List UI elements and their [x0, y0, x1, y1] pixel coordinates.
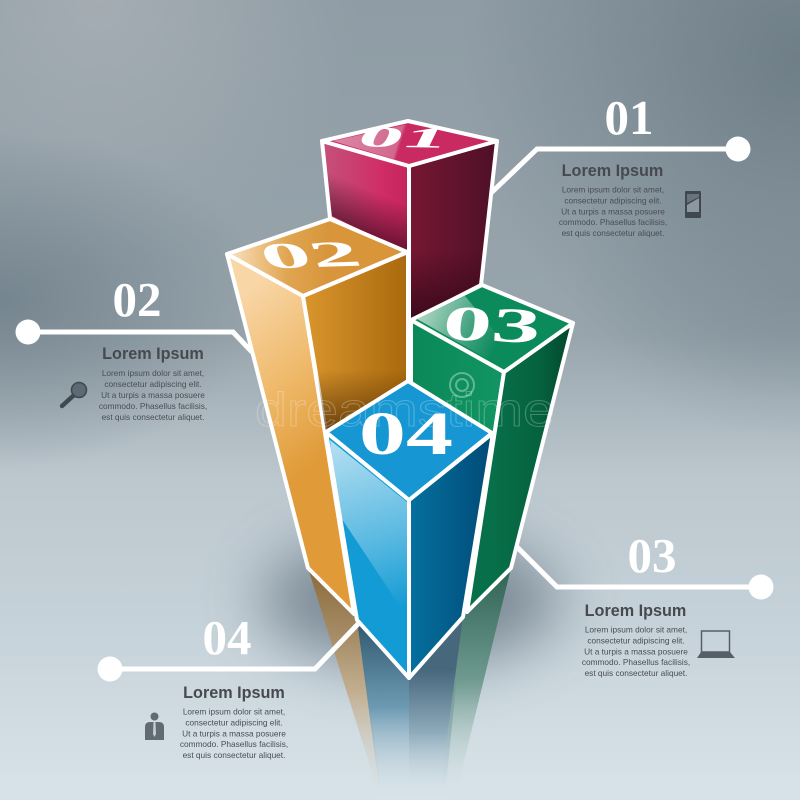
- bar 01: crimson: [322, 121, 497, 322]
- numeral 03 on top: 03: [440, 296, 544, 354]
- icon: smartphone: [685, 191, 701, 218]
- icon: laptop: [697, 631, 735, 658]
- callout 04: Ut a turpis a massa posuere: [182, 728, 286, 738]
- callout 04: commodo. Phasellus facilisis,: [180, 739, 288, 749]
- reflections under the bars: [308, 568, 511, 795]
- numeral 01 on top: 01: [352, 121, 455, 154]
- bar 04: blue: [326, 381, 493, 678]
- icon: magnifier: [62, 382, 86, 406]
- callout 01: Lorem Ipsum: [562, 162, 663, 180]
- numeral 02 on top: 02: [253, 234, 367, 277]
- callout 04: Lorem ipsum dolor sit amet,: [183, 706, 285, 716]
- callout 04: est quis consectetur aliquet.: [183, 750, 285, 760]
- callout 02: Ut a turpis a massa posuere: [101, 390, 205, 400]
- numeral 04 on top: 04: [359, 400, 453, 468]
- bar 03: green: [411, 285, 573, 612]
- callout 03: Lorem Ipsum: [585, 602, 686, 620]
- callout 03: est quis consectetur aliquet.: [585, 668, 687, 678]
- callout 03: Ut a turpis a massa posuere: [584, 646, 688, 656]
- callout 03: consectetur adipiscing elit.: [587, 636, 685, 646]
- callout 01: est quis consectetur aliquet.: [562, 228, 664, 238]
- callout 01: consectetur adipiscing elit.: [564, 196, 662, 206]
- callout 01: [491, 90, 750, 238]
- callout 03: Lorem ipsum dolor sit amet,: [585, 624, 687, 634]
- callout 01: commodo. Phasellus facilisis,: [559, 217, 667, 227]
- callout 01: Lorem ipsum dolor sit amet,: [562, 184, 664, 194]
- callout 02: [16, 272, 252, 422]
- watermark: [255, 373, 555, 436]
- callout 03: [516, 528, 774, 678]
- callout 02: Lorem Ipsum: [102, 345, 204, 363]
- callout 04: 04: [202, 610, 252, 665]
- callout 02: est quis consectetur aliquet.: [102, 412, 204, 422]
- callout 02: consectetur adipiscing elit.: [104, 379, 202, 389]
- callout 03: 03: [628, 528, 676, 583]
- callout 01: 01: [604, 90, 654, 145]
- callout 02: 02: [112, 272, 162, 327]
- callout 03: commodo. Phasellus facilisis,: [582, 657, 690, 667]
- callout 04: consectetur adipiscing elit.: [185, 718, 283, 728]
- callout 02: commodo. Phasellus facilisis,: [99, 401, 207, 411]
- callout 04: [98, 610, 358, 760]
- bar 02: orange: [227, 219, 408, 614]
- callout 04: Lorem Ipsum: [183, 684, 285, 702]
- watermark: dreamstime: [255, 383, 555, 436]
- callout 01: Ut a turpis a massa posuere: [561, 206, 665, 216]
- callout 02: Lorem ipsum dolor sit amet,: [102, 368, 204, 378]
- icon: businessperson: [145, 712, 164, 740]
